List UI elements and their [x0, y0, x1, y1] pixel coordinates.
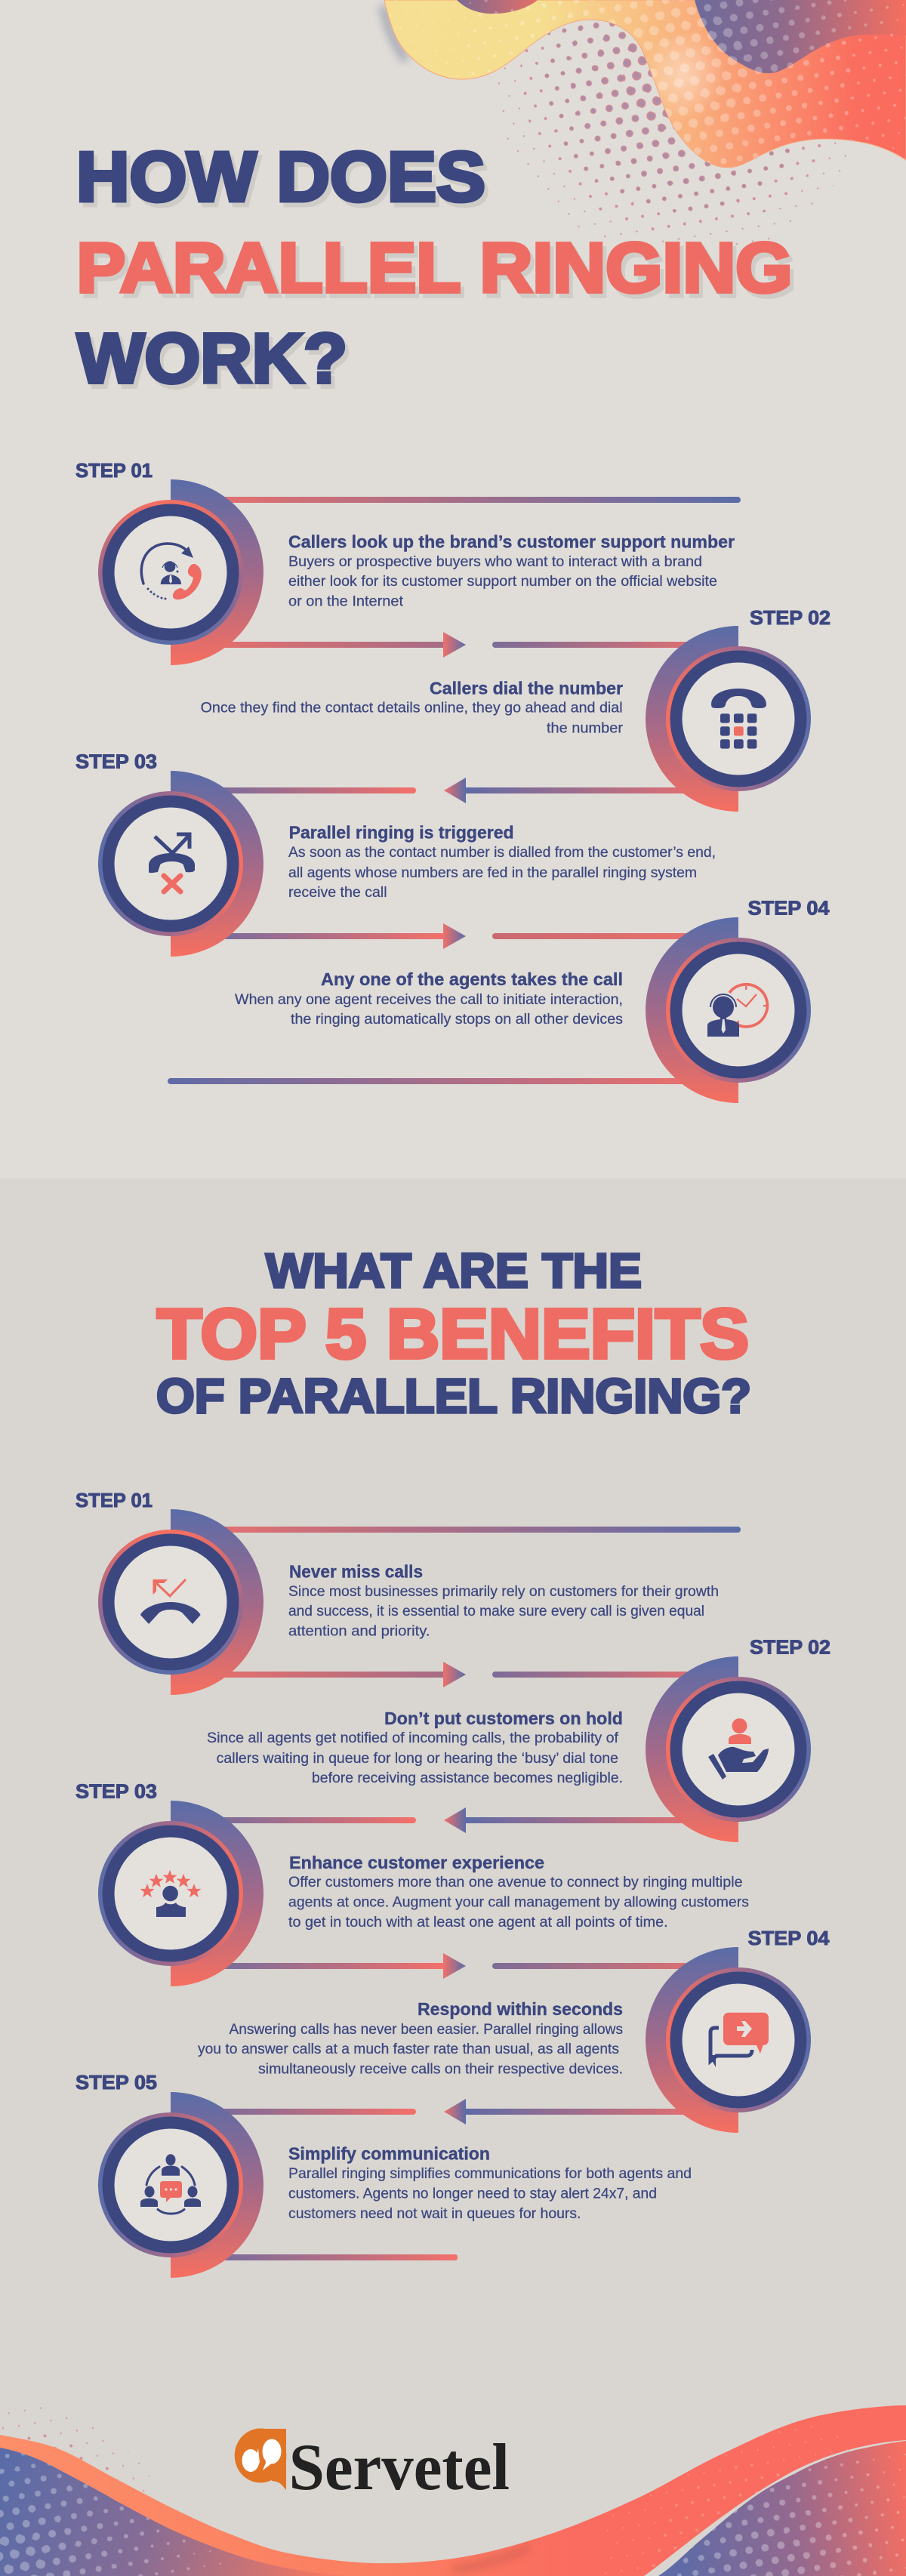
text block: Once they find the contact details online, they go ahead and dial [201, 701, 623, 716]
step label: STEP 01 [76, 1489, 153, 1511]
text block: Don’t put customers on hold [384, 1709, 623, 1728]
text block: you to answer calls at a much faster rate than usual, as all agents [198, 2041, 619, 2057]
title: top 5 benefits: OF PARALLEL RINGING? [156, 1369, 751, 1423]
text block [288, 1561, 719, 1640]
panel: how it works step 1 [76, 459, 741, 665]
text block: Since all agents get notified of incoming calls, the probability of [207, 1730, 619, 1746]
text block: Respond within seconds [418, 1999, 623, 2019]
connector line lower with arrow [174, 1953, 734, 1979]
text block: to get in touch with at least one agent at all points of time. [288, 1915, 668, 1930]
text block: simultaneously receive calls on their respective devices. [258, 2062, 623, 2078]
footer decorative waves with halftone dots [0, 2405, 906, 2576]
text block: Callers look up the brand’s customer support number [288, 532, 735, 552]
icon: desk phone keypad [711, 689, 766, 749]
panel: benefit 4 [174, 1927, 830, 2133]
text block [288, 532, 735, 610]
text block [207, 1709, 623, 1786]
text block: the number [547, 721, 624, 737]
icon: split call with cross [149, 834, 195, 892]
text block: Callers dial the number [430, 678, 623, 698]
text block [198, 1999, 623, 2078]
title: How does parallel ringing work: WORK? [77, 319, 347, 397]
step label: STEP 02 [750, 1636, 830, 1659]
connector line lower with arrow [174, 923, 734, 949]
text block: Any one of the agents takes the call [321, 969, 623, 989]
text block [235, 969, 623, 1028]
background: lower section [0, 1179, 906, 2576]
title: top 5 benefits [156, 1243, 751, 1423]
medallion [646, 1656, 811, 1842]
icon: team communication [140, 2154, 201, 2214]
text block [201, 678, 624, 737]
text block: the ringing automatically stops on all other devices [291, 1012, 623, 1028]
medallion [98, 771, 263, 957]
title: How does parallel ringing work: HOW DOES [80, 142, 489, 220]
connector line lower [174, 2254, 458, 2260]
medallion [98, 2092, 263, 2278]
text block: or on the Internet [288, 594, 404, 610]
connector line with arrow [174, 2099, 723, 2125]
panel: benefit 1 [76, 1489, 741, 1695]
text block: Simplify communication [288, 2144, 490, 2164]
text block: receive the call [288, 885, 387, 901]
panel: how it works step 4 [168, 897, 830, 1103]
text block: and success, it is essential to make sure every call is given equal [288, 1604, 704, 1619]
medallion [98, 479, 263, 665]
panel: benefit 2 [174, 1636, 830, 1842]
text block: When any one agent receives the call to initiate interaction, [235, 992, 623, 1008]
text block: Since most businesses primarily rely on customers for their growth [288, 1584, 719, 1600]
panel: how it works step 3 [76, 750, 734, 957]
step label: STEP 04 [747, 897, 830, 920]
text block: As soon as the contact number is dialled from the customer’s end, [288, 845, 716, 861]
text block: before receiving assistance becomes negligible. [312, 1770, 623, 1786]
title: How does parallel ringing work: HOW DOES [76, 137, 485, 216]
icon: missed call [140, 1579, 201, 1624]
text block [288, 1853, 749, 1930]
medallion [98, 1801, 263, 1986]
connector line bottom [168, 1078, 726, 1084]
icon: chat bubbles with arrow [709, 2013, 769, 2067]
step label: STEP 01 [76, 459, 153, 482]
step label: STEP 03 [76, 1780, 157, 1803]
top decorative waves with halftone dots [383, 0, 906, 291]
icon: agent and phone [141, 544, 202, 599]
text block [288, 2144, 692, 2222]
title: top 5 benefits: TOP 5 BENEFITS [157, 1294, 749, 1373]
step label: STEP 04 [747, 1927, 830, 1949]
icon: agent with clock [707, 984, 767, 1037]
medallion [98, 1509, 263, 1695]
icon: hand holding person [708, 1718, 769, 1779]
title: How does parallel ringing work [76, 137, 796, 402]
text block: agents at once. Augment your call management by allowing customers [288, 1895, 749, 1911]
text block: Offer customers more than one avenue to connect by ringing multiple [288, 1875, 743, 1890]
text block: Enhance customer experience [289, 1853, 544, 1872]
connector line top [174, 497, 741, 503]
text block: attention and priority. [288, 1624, 430, 1640]
text block: Never miss calls [289, 1561, 423, 1581]
connector line top [174, 1527, 741, 1533]
medallion [646, 917, 811, 1103]
medallion [646, 626, 811, 812]
connector line lower with arrow [174, 1662, 734, 1687]
step label: STEP 03 [76, 750, 157, 773]
text block: Buyers or prospective buyers who want to interact with a brand [288, 554, 702, 570]
panel: how it works step 2 [174, 606, 830, 812]
connector line with arrow [174, 1807, 723, 1833]
panel: benefit 3 [76, 1780, 749, 1986]
text block: Parallel ringing simplifies communications for both agents and [288, 2166, 692, 2182]
text block: either look for its customer support number on the official website [288, 574, 717, 590]
text block: Answering calls has never been easier. Parallel ringing allows [230, 2022, 623, 2038]
text block: customers need not wait in queues for hours. [288, 2206, 581, 2222]
text block: all agents whose numbers are fed in the parallel ringing system [288, 865, 697, 881]
text block: callers waiting in queue for long or hearing the ‘busy’ dial tone [217, 1751, 618, 1767]
background: upper section [0, 0, 906, 1179]
wordmark: Servetel [289, 2431, 510, 2504]
title: How does parallel ringing work: PARALLEL RINGING [77, 228, 793, 307]
connector line lower with arrow [174, 632, 734, 658]
title: How does parallel ringing work: PARALLEL RINGING [80, 233, 796, 311]
icon: speech bubble mark [235, 2428, 286, 2490]
text block: Parallel ringing is triggered [289, 823, 514, 843]
title: top 5 benefits: WHAT ARE THE [266, 1243, 642, 1298]
title: How does parallel ringing work: WORK? [81, 323, 351, 402]
icon: person with star rating [140, 1870, 201, 1917]
medallion [646, 1947, 811, 2133]
step label: STEP 02 [750, 606, 830, 629]
text block [288, 823, 716, 901]
text block: customers. Agents no longer need to stay alert 24x7, and [288, 2186, 657, 2202]
logo: Servetel [235, 2428, 510, 2504]
panel: benefit 5 [76, 2071, 692, 2278]
connector line with arrow [174, 778, 723, 803]
step label: STEP 05 [76, 2071, 157, 2094]
